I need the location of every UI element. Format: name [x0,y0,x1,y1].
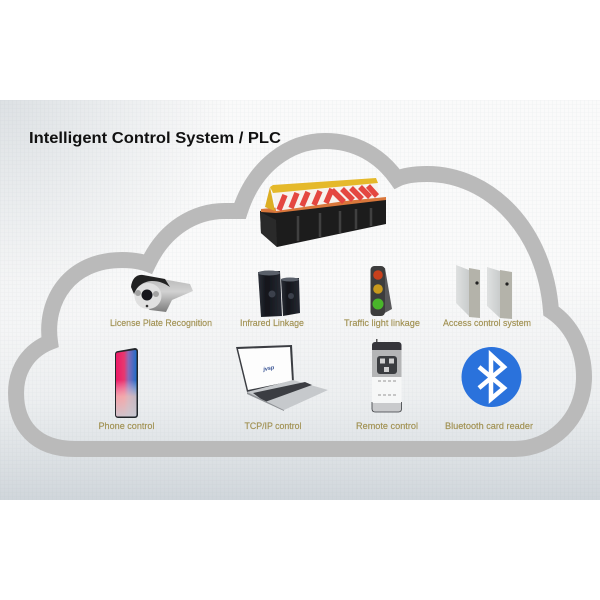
cloud outline [16,141,584,449]
label: tcp/ip control: TCP/IP control [244,421,302,432]
background panel [0,100,600,500]
label: bluetooth card reader: Bluetooth card reader [445,421,533,432]
label: traffic light linkage: Traffic light linkage [344,318,420,329]
label: access control system: Access control system [443,318,531,329]
title: Intelligent Control System / PLC [29,130,281,147]
icon: security camera [131,275,193,312]
icon: remote control [372,339,402,412]
icon: road blocker barrier [260,178,386,247]
icon: laptop [236,345,328,411]
icon: infrared sensors [258,270,300,317]
label: license plate recognition: License Plate Recognition [110,318,212,329]
icon: laptop: jvsp [262,365,275,373]
icon: smartphone [115,348,138,418]
label: phone control: Phone control [98,421,154,432]
icon: bluetooth [462,347,522,407]
label: infrared linkage: Infrared Linkage [240,318,304,329]
icon: traffic light [370,266,392,316]
icon: access control gates [456,265,512,319]
label: remote control: Remote control [356,421,418,432]
